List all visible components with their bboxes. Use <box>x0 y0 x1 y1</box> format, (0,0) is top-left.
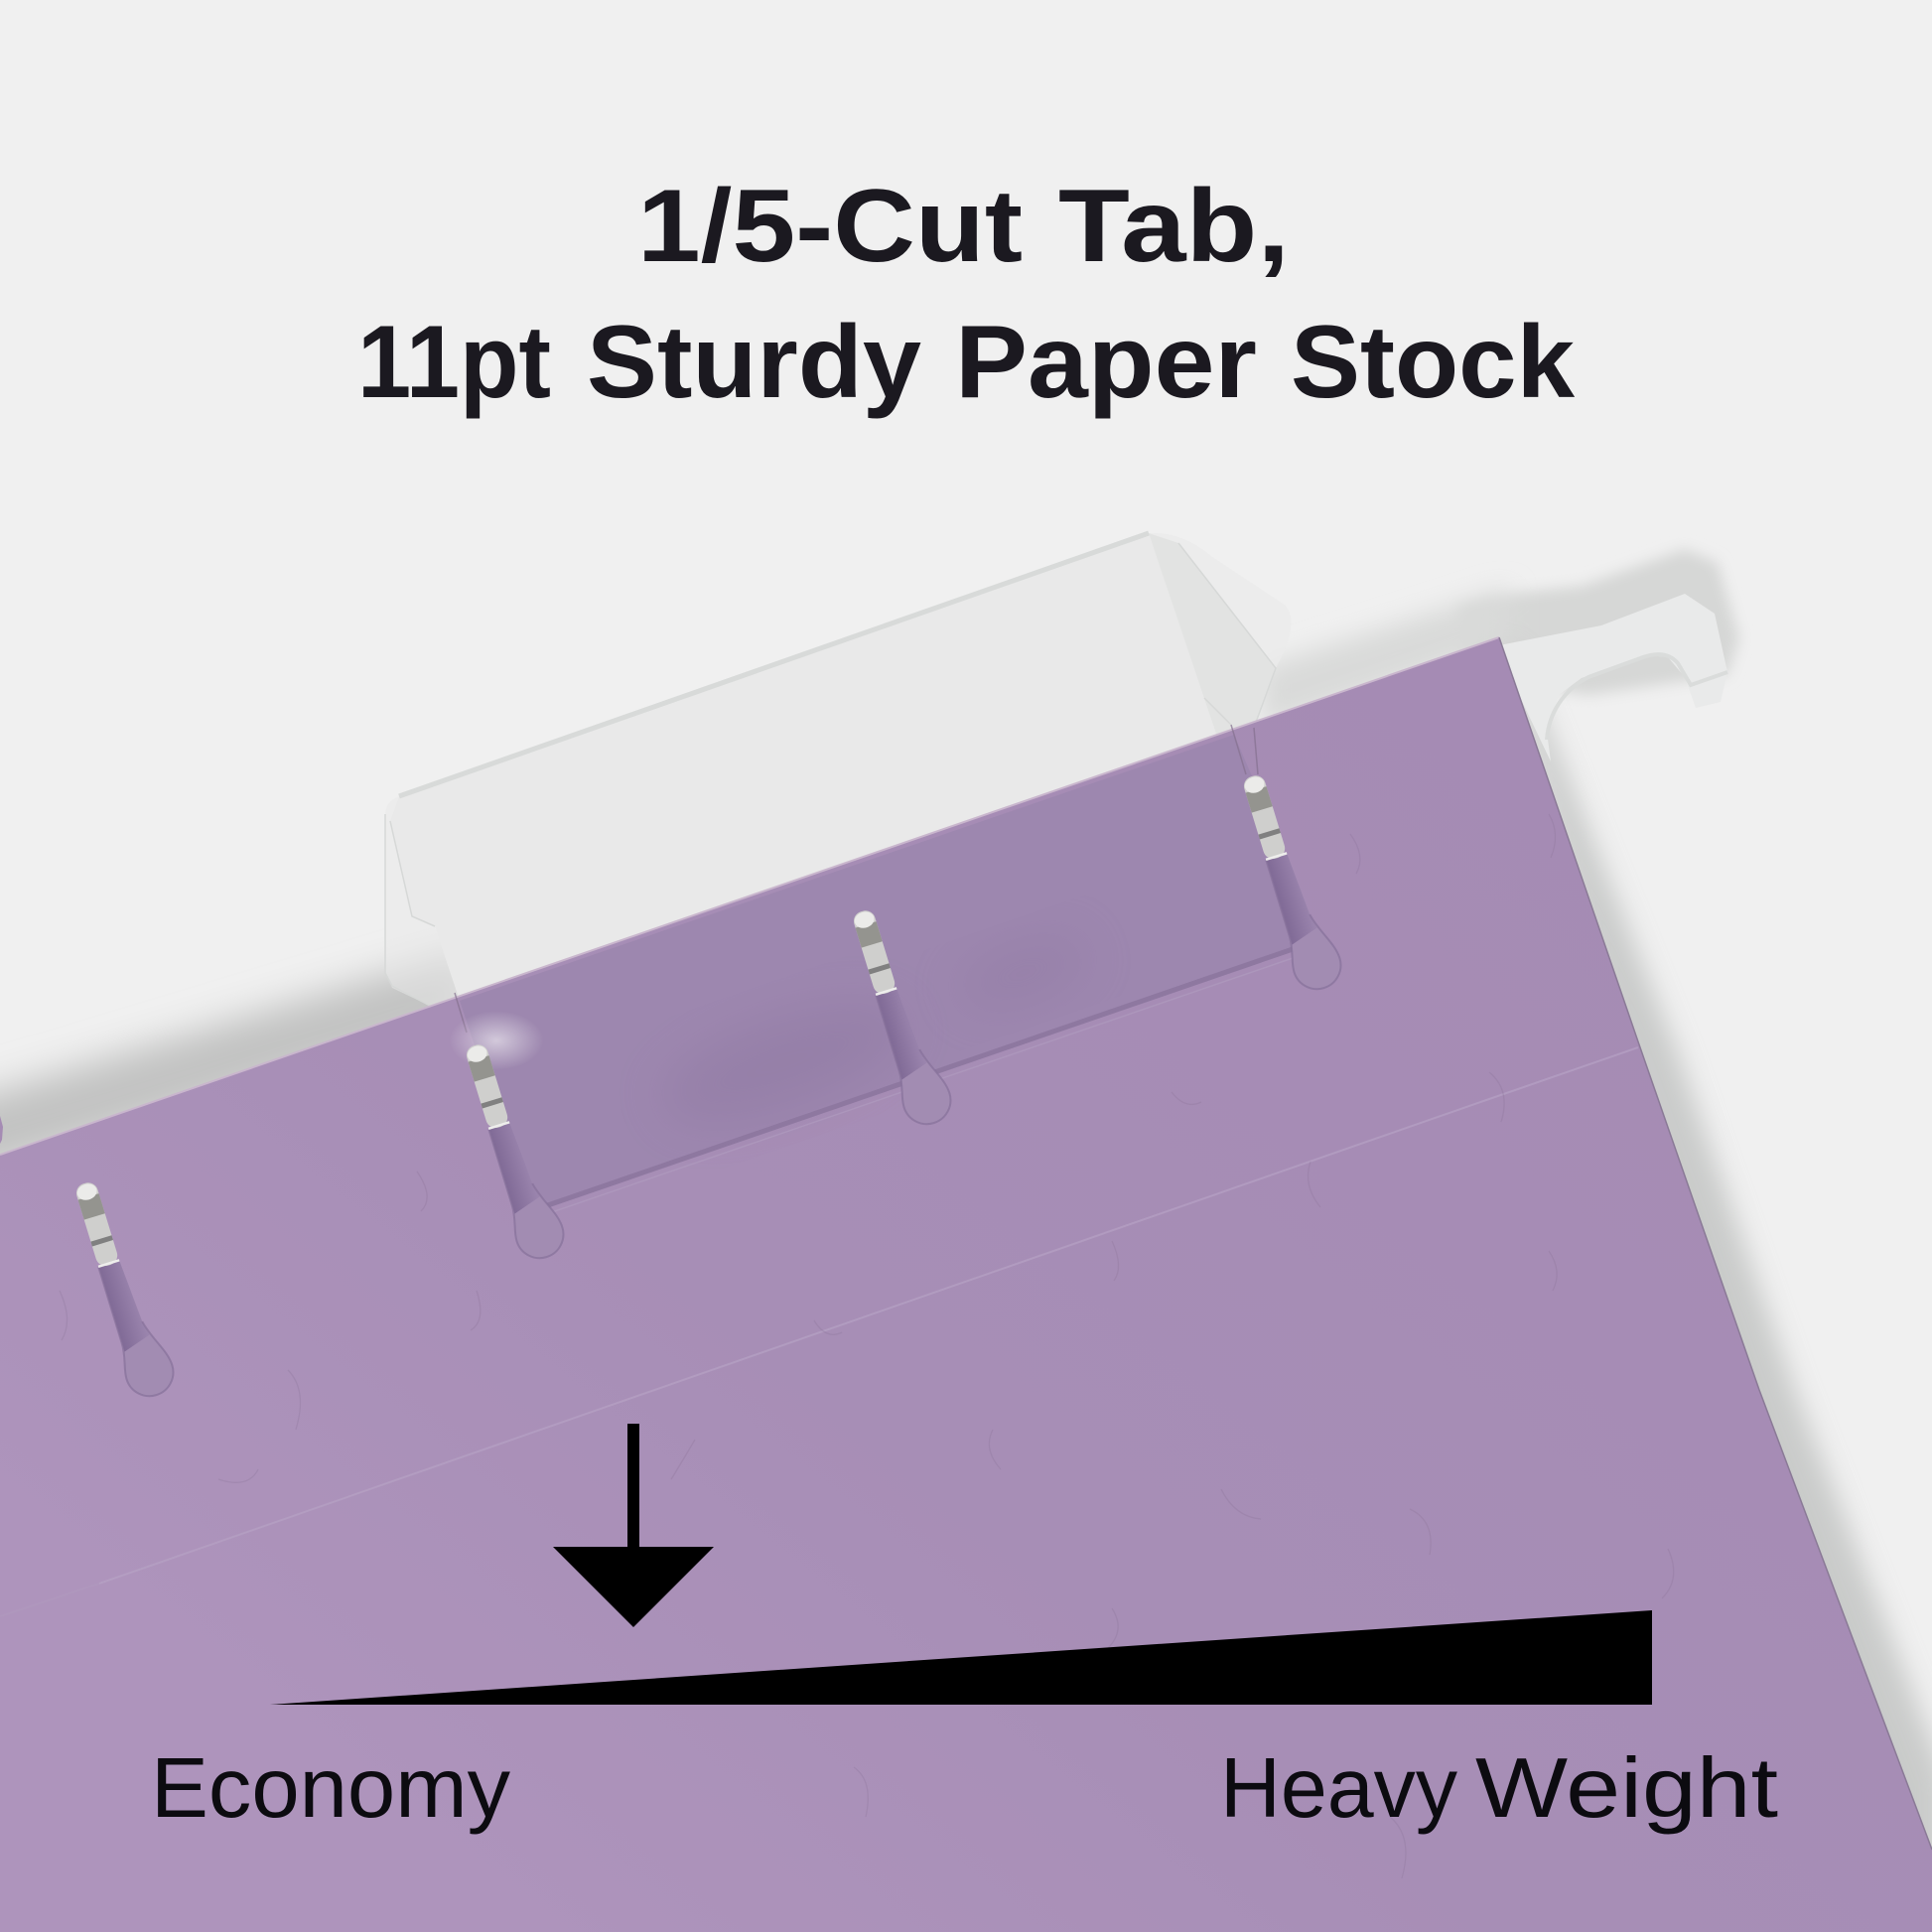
tab edge lines <box>399 533 1149 796</box>
paper weight wedge scale <box>270 1610 1652 1705</box>
paper edge highlights <box>0 637 1932 1850</box>
title: Tab, <box>1058 169 1290 284</box>
label: Heavy Weight <box>1220 1741 1778 1836</box>
tab left flap <box>385 796 467 1033</box>
tab right flap <box>1149 533 1292 740</box>
tab slot 1 <box>69 1174 179 1402</box>
glow at clip <box>449 1011 544 1070</box>
paper crease lines <box>0 1047 1638 1616</box>
label: Heavy Weight: Weight <box>1475 1741 1778 1836</box>
clear plastic tab insert <box>385 533 1292 1033</box>
purple hanging folder paper <box>0 637 1932 1932</box>
label: Economy: Economy <box>151 1741 511 1836</box>
title: Sturdy <box>587 305 921 420</box>
left sliver of adjacent folder <box>0 1116 3 1144</box>
label: Heavy Weight: Heavy <box>1220 1741 1457 1836</box>
tab overlap on paper <box>455 725 1299 1214</box>
title: Stock <box>1291 305 1575 420</box>
tab slot 2 <box>459 1036 569 1264</box>
title: 11pt <box>357 305 551 420</box>
hanger hook <box>1499 594 1727 761</box>
weight indicator arrow <box>553 1424 714 1627</box>
title <box>357 169 1575 420</box>
tab slot 3 <box>846 902 956 1130</box>
tab right fold shading <box>1149 533 1276 740</box>
shadow behind hanger and folder <box>0 549 1932 1932</box>
title: Paper <box>955 305 1257 420</box>
title: 1/5-Cut <box>637 169 1023 284</box>
tab body <box>390 533 1218 1001</box>
paper fibres <box>60 814 1674 1878</box>
tab slot 4 <box>1236 767 1346 995</box>
